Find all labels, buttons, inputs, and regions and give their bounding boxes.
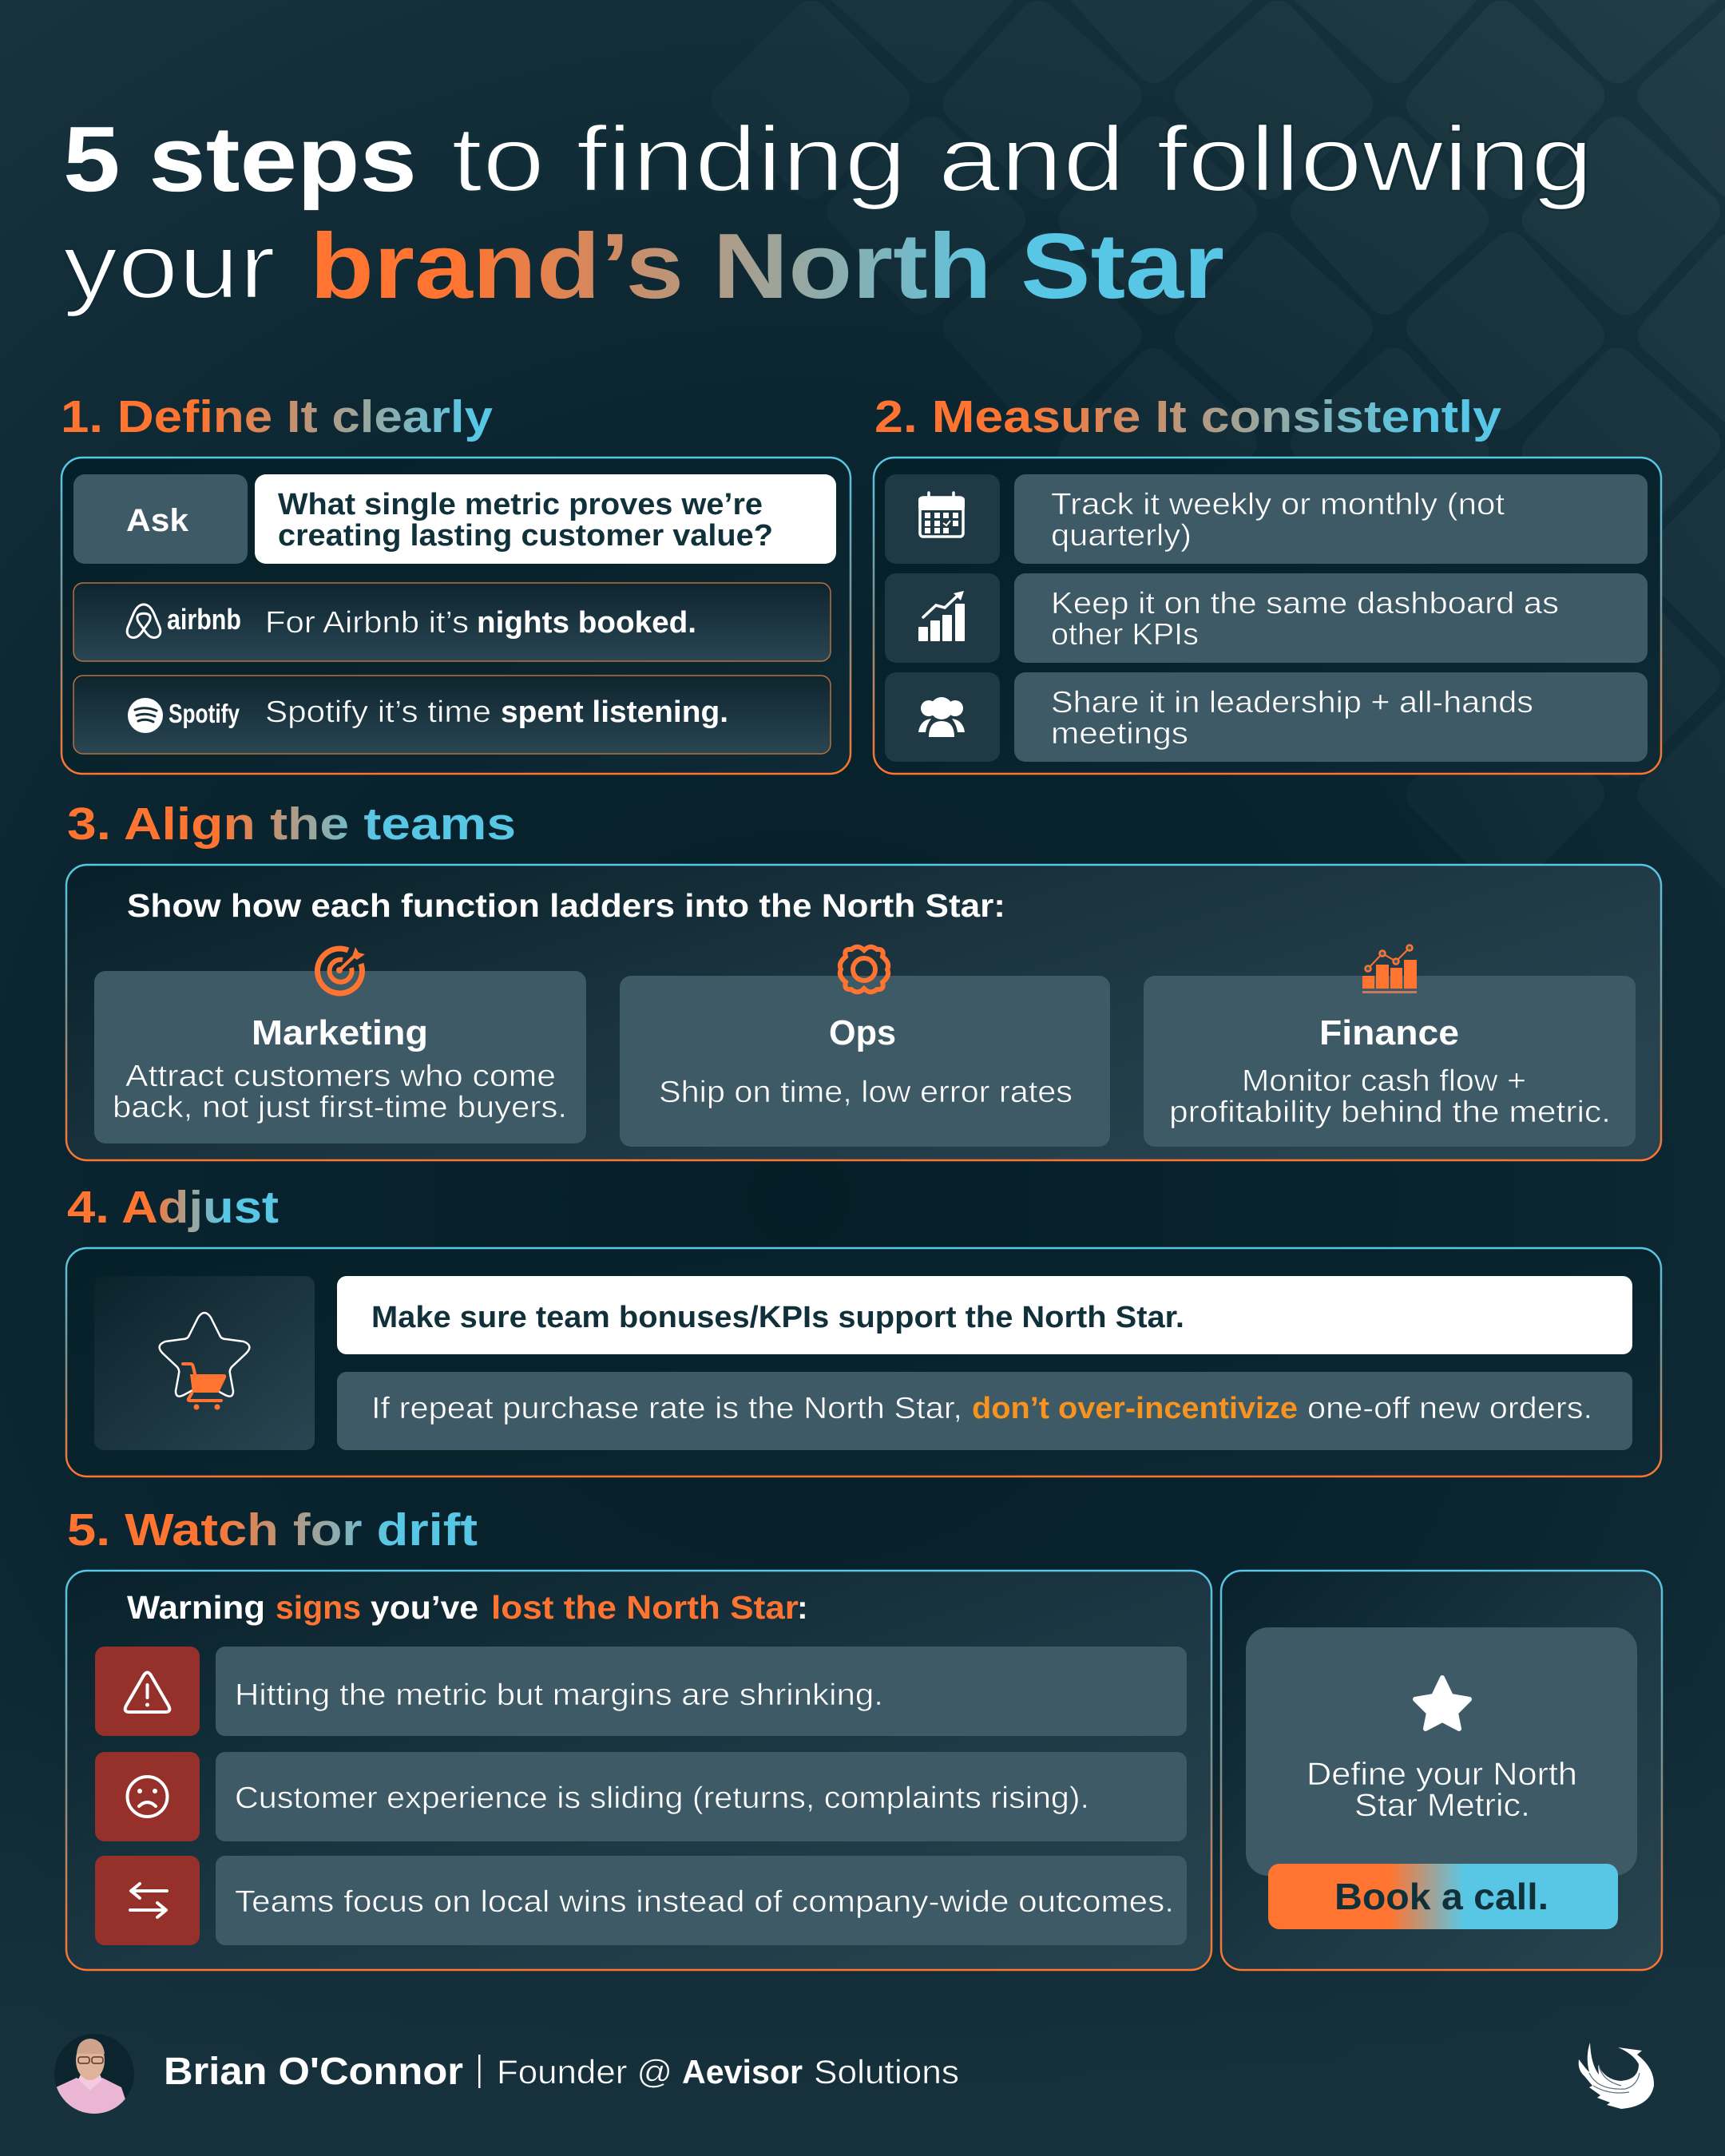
panel: define it clearly: [61, 458, 851, 774]
ask question: [255, 474, 836, 564]
example text: one-off new orders.: [1307, 1392, 1592, 1425]
icon: author photo: [54, 2034, 134, 2116]
icon: sad face: [95, 1752, 200, 1841]
title: 5 steps: [63, 107, 417, 211]
card: ops: Ship on time, low error rates: [659, 1076, 1073, 1109]
heading: step 4: 4. Adjust: [67, 1182, 279, 1233]
icon: spotify logo: Spotify: [169, 699, 240, 728]
panel: align the teams: [66, 865, 1661, 1160]
card: marketing: Attract customers who come: [125, 1060, 556, 1093]
airbnb text: For Airbnb it’s: [265, 606, 469, 640]
cta card: [1246, 1627, 1637, 1876]
warning text 3: Teams focus on local wins instead of company-wide outcomes.: [235, 1885, 1174, 1919]
icon: gear: [840, 947, 888, 992]
button: book a call: [1268, 1864, 1618, 1929]
button: book a call: Book a call.: [1334, 1876, 1549, 1917]
title: brand’s North Star: [310, 214, 1224, 318]
warning heading: lost the North Star: [491, 1589, 799, 1626]
warning text 2: Customer experience is sliding (returns, complaints rising).: [235, 1781, 1089, 1815]
track text: [1014, 474, 1648, 564]
icon: airbnb logo: [127, 603, 241, 637]
dashboard text: other KPIs: [1051, 618, 1199, 652]
spotify text: Spotify it’s time: [265, 696, 491, 729]
panel: measure it consistently: [874, 458, 1661, 774]
heading: step 3: 3. Align the teams: [67, 799, 516, 850]
icon: airbnb logo: airbnb: [167, 603, 241, 636]
heading: step 2: 2. Measure It consistently: [874, 391, 1501, 442]
airbnb text: [265, 606, 696, 640]
panel intro: Show how each function ladders into the North Star:: [127, 887, 1005, 924]
ask label: Ask: [126, 503, 189, 538]
card: finance: [1144, 976, 1636, 1147]
share text: [1014, 672, 1648, 762]
spotify text: [265, 696, 728, 729]
cta card: Star Metric.: [1354, 1788, 1530, 1823]
warning text 2: [216, 1752, 1187, 1841]
warning heading: Warning: [127, 1589, 265, 1626]
card: finance: Monitor cash flow +: [1242, 1064, 1526, 1098]
icon: star with cart: [94, 1276, 315, 1450]
callout: bonuses: Make sure team bonuses/KPIs support the North Star.: [371, 1301, 1184, 1334]
dashboard text: [1014, 573, 1648, 663]
author credit: [164, 2051, 959, 2093]
share text: meetings: [1051, 717, 1188, 751]
icon: finance chart: [1362, 945, 1417, 993]
airbnb text: nights booked.: [477, 606, 696, 640]
icon: calendar: [885, 474, 1000, 564]
icon: spotify logo: [128, 698, 240, 733]
title: your: [63, 214, 276, 318]
card: finance: profitability behind the metric.: [1169, 1096, 1611, 1129]
ask question: creating lasting customer value?: [278, 519, 773, 553]
panel: adjust: [66, 1248, 1661, 1476]
author credit: Brian O'Connor: [164, 2051, 463, 2093]
warning text 3: [216, 1856, 1187, 1945]
ask question: What single metric proves we’re: [278, 488, 763, 521]
example text: don’t over-incentivize: [972, 1392, 1298, 1425]
dashboard text: Keep it on the same dashboard as: [1051, 587, 1559, 620]
track text: quarterly): [1051, 519, 1192, 553]
example text: [337, 1372, 1632, 1450]
warning text 1: Hitting the metric but margins are shrinking.: [235, 1678, 883, 1712]
icon: star: [1415, 1678, 1469, 1729]
track text: Track it weekly or monthly (not: [1051, 488, 1505, 521]
warning heading: :: [797, 1589, 808, 1626]
icon: people: [885, 672, 1000, 762]
ask label: [73, 474, 248, 564]
icon: swap arrows: [95, 1856, 200, 1945]
author credit: Aevisor: [682, 2053, 803, 2091]
warning text 1: [216, 1647, 1187, 1736]
airbnb row: [73, 583, 831, 661]
card: ops: Ops: [829, 1013, 896, 1052]
heading: step 5: 5. Watch for drift: [67, 1504, 478, 1556]
warning heading: you’ve: [371, 1589, 478, 1626]
spotify row: [73, 676, 831, 754]
heading: step 1: 1. Define It clearly: [61, 391, 493, 442]
icon: phoenix logo: [1579, 2043, 1654, 2109]
panel: call to action: [1221, 1571, 1662, 1970]
card: marketing: Marketing: [252, 1013, 428, 1052]
icon: warning triangle: [95, 1647, 200, 1736]
card: finance: Finance: [1319, 1013, 1459, 1052]
icon: growth chart: [885, 573, 1000, 663]
panel: warning signs: [66, 1571, 1211, 1970]
title: [63, 107, 1593, 318]
warning heading: [127, 1589, 808, 1626]
share text: Share it in leadership + all-hands: [1051, 686, 1533, 719]
title: to finding and following: [451, 107, 1593, 211]
spotify text: spent listening.: [501, 696, 728, 729]
author credit: Solutions: [814, 2053, 959, 2091]
author credit: Founder @: [497, 2053, 672, 2091]
card: marketing: back, not just first-time buyers.: [113, 1091, 567, 1124]
icon: target: [317, 947, 365, 993]
card: marketing: [94, 971, 586, 1143]
example text: If repeat purchase rate is the North Star,: [371, 1392, 962, 1425]
card: ops: [620, 976, 1110, 1147]
cta card: Define your North: [1307, 1757, 1577, 1792]
warning heading: signs: [276, 1589, 361, 1626]
callout: bonuses: [337, 1276, 1632, 1354]
